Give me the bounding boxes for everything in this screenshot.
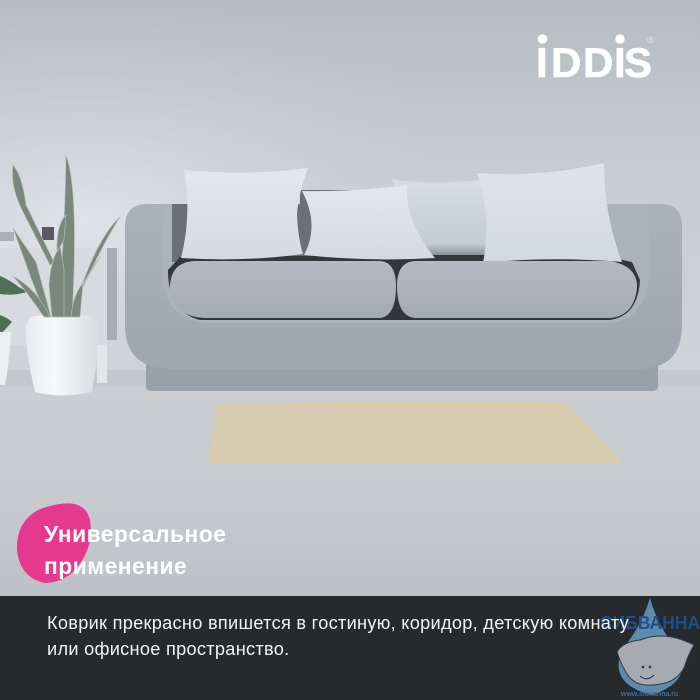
pillow: right large [477,163,622,263]
rug [208,401,622,463]
right seat cushion [397,261,637,318]
bathtub [617,636,694,685]
pillow: middle [302,185,435,259]
watermark url: www.sibvanna.ru [620,691,678,698]
plant pot right [26,314,98,396]
logo wordmark: IDDIS [536,39,652,86]
skirting board [0,370,700,388]
water drop [619,598,682,695]
bathtub face [640,666,654,679]
dark description band [0,596,700,700]
small pot left [0,332,11,385]
registered mark: ® [647,35,654,45]
pink circle [17,503,91,583]
left seat cushion [170,261,396,318]
brand logo [536,34,654,86]
back pillow: far right [391,179,490,255]
floor [0,387,700,600]
sofa body [125,204,682,369]
heading: Универсальное [44,521,226,547]
sansevieria plant [12,155,120,317]
sofa inner lining [162,204,649,323]
seat shadow [168,255,640,320]
heading [44,521,226,579]
pillow: left large [181,168,308,259]
watermark name: СИБВАННА [600,613,700,633]
description text: Коврик прекрасно впишется в гостиную, коридор, детскую комнату [47,613,629,633]
description text: или офисное пространство. [47,639,289,659]
sofa dark back [172,190,480,262]
description text [47,613,629,659]
console table [0,227,118,383]
wall [0,0,700,372]
sofa base [146,360,658,391]
small plant left [0,276,27,335]
heading: применение [44,553,187,579]
